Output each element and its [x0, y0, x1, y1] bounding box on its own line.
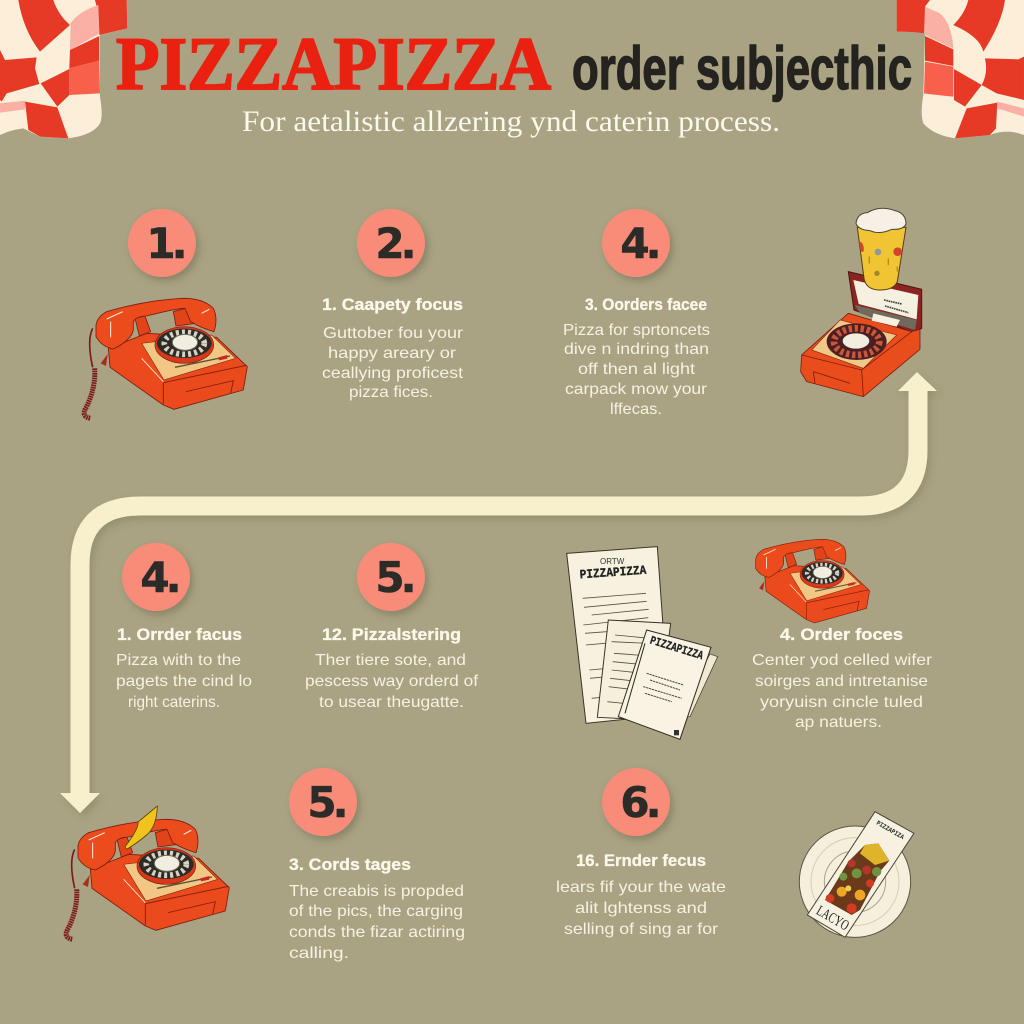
icon: stack of pizza menus: PIZZAPIZZA — [648, 634, 705, 663]
body: Guttober fou your — [323, 325, 464, 342]
corner decoration: left checkered cloth — [0, 0, 127, 138]
number badge 6: 6. — [620, 778, 658, 827]
subtitle: For aetalistic allzering ynd caterin process. — [242, 105, 780, 138]
body — [289, 883, 465, 962]
step text: order focus — [116, 625, 252, 711]
number badge 4: 4. — [140, 553, 178, 602]
step text: capacity focus — [322, 295, 464, 401]
number badge 1: 1. — [146, 219, 184, 268]
back sheet — [677, 654, 718, 717]
body: ap natuers. — [795, 714, 882, 731]
icon: red telephone with yellow leaf — [66, 806, 229, 939]
body: Pizza with to the — [116, 652, 241, 669]
step text: order foces — [752, 625, 933, 731]
body: right caterins. — [128, 694, 220, 711]
body: pagets the cind lo — [116, 673, 252, 690]
number badge 4 top: 4. — [620, 219, 658, 268]
body — [116, 652, 252, 711]
base — [801, 313, 920, 397]
number badge 5: 5. — [375, 553, 413, 602]
heading: 4. Order foces — [780, 625, 903, 644]
body: pescess way orderd of — [305, 673, 479, 690]
body: selling of sing ar for — [564, 921, 719, 938]
body: conds the fizar actiring — [289, 924, 465, 941]
yellow leaf — [125, 806, 157, 849]
body: soirges and intretanise — [755, 673, 928, 690]
title — [116, 23, 912, 106]
heading: 16. Ernder fecus — [576, 851, 706, 870]
ticket — [807, 812, 914, 937]
step text: order focus — [556, 851, 726, 938]
body: Pizza for sprtoncets — [563, 322, 710, 339]
step text: pizza listing — [305, 625, 479, 711]
body: yoryuisn cincle tuled — [760, 694, 923, 711]
body: The creabis is propded — [289, 883, 464, 900]
heading: 1. Caapety focus — [322, 295, 463, 314]
title: red word: PIZZAPIZZA — [116, 23, 551, 106]
body: calling. — [289, 945, 349, 962]
icon: telephone base with beer glass and receipt — [801, 208, 922, 397]
body: Ther tiere sote, and — [315, 652, 466, 669]
process arrow path — [60, 372, 937, 813]
body: dive n indring than — [564, 341, 709, 358]
heading: 3. Cords tages — [289, 855, 411, 874]
printer lid — [848, 272, 922, 333]
heading: 1. Orrder facus — [117, 625, 242, 644]
corner decoration: right checkered cloth — [897, 0, 1024, 138]
body: pizza fices. — [349, 384, 433, 401]
icon: red rotary telephone — [84, 298, 247, 418]
number badge 1 — [128, 209, 196, 277]
body: ceallying proficest — [322, 365, 464, 382]
body: carpack mow your — [565, 381, 708, 398]
body: Center yod celled wifer — [752, 652, 933, 669]
step text: orders face — [563, 295, 710, 418]
step text: cords tages — [289, 855, 465, 962]
beer glass — [857, 227, 906, 290]
front menu page — [618, 630, 711, 739]
second menu page — [597, 620, 671, 720]
number badge 4 — [122, 543, 190, 611]
icon: red rotary telephone small — [756, 539, 870, 623]
body — [305, 652, 479, 711]
body — [556, 879, 726, 938]
body: to usear theugatte. — [319, 694, 464, 711]
body — [563, 322, 710, 418]
heading: 3. Oorders facee — [585, 295, 707, 314]
number badge 5 lower: 5. — [307, 778, 345, 827]
heading: 12. Pizzalstering — [322, 625, 461, 644]
icon: plate with menu ticket — [799, 812, 914, 937]
icon: stack of pizza menus — [567, 547, 718, 739]
ticket: LACYO — [813, 903, 852, 934]
body: lears fif your the wate — [556, 879, 726, 896]
number badge 6 — [602, 768, 670, 836]
number badge 4 top — [602, 209, 670, 277]
body: off then al light — [578, 361, 696, 378]
body: of the pics, the carging — [289, 903, 463, 920]
large menu page — [567, 547, 663, 723]
body: alit lghtenss and — [575, 900, 707, 917]
ticket: PIZZAPIZA — [875, 819, 906, 841]
body: lffecas. — [610, 401, 662, 418]
icon: stack of pizza menus: PIZZAPIZZA — [579, 563, 647, 582]
body — [752, 652, 933, 731]
body: happy areary or — [328, 345, 457, 362]
number badge 5 lower — [289, 768, 357, 836]
plate — [799, 826, 911, 937]
icon: stack of pizza menus: ORTW — [600, 557, 625, 566]
body — [322, 325, 464, 401]
number badge 5 — [357, 543, 425, 611]
number badge 2: 2. — [375, 219, 413, 268]
number badge 2 — [357, 209, 425, 277]
